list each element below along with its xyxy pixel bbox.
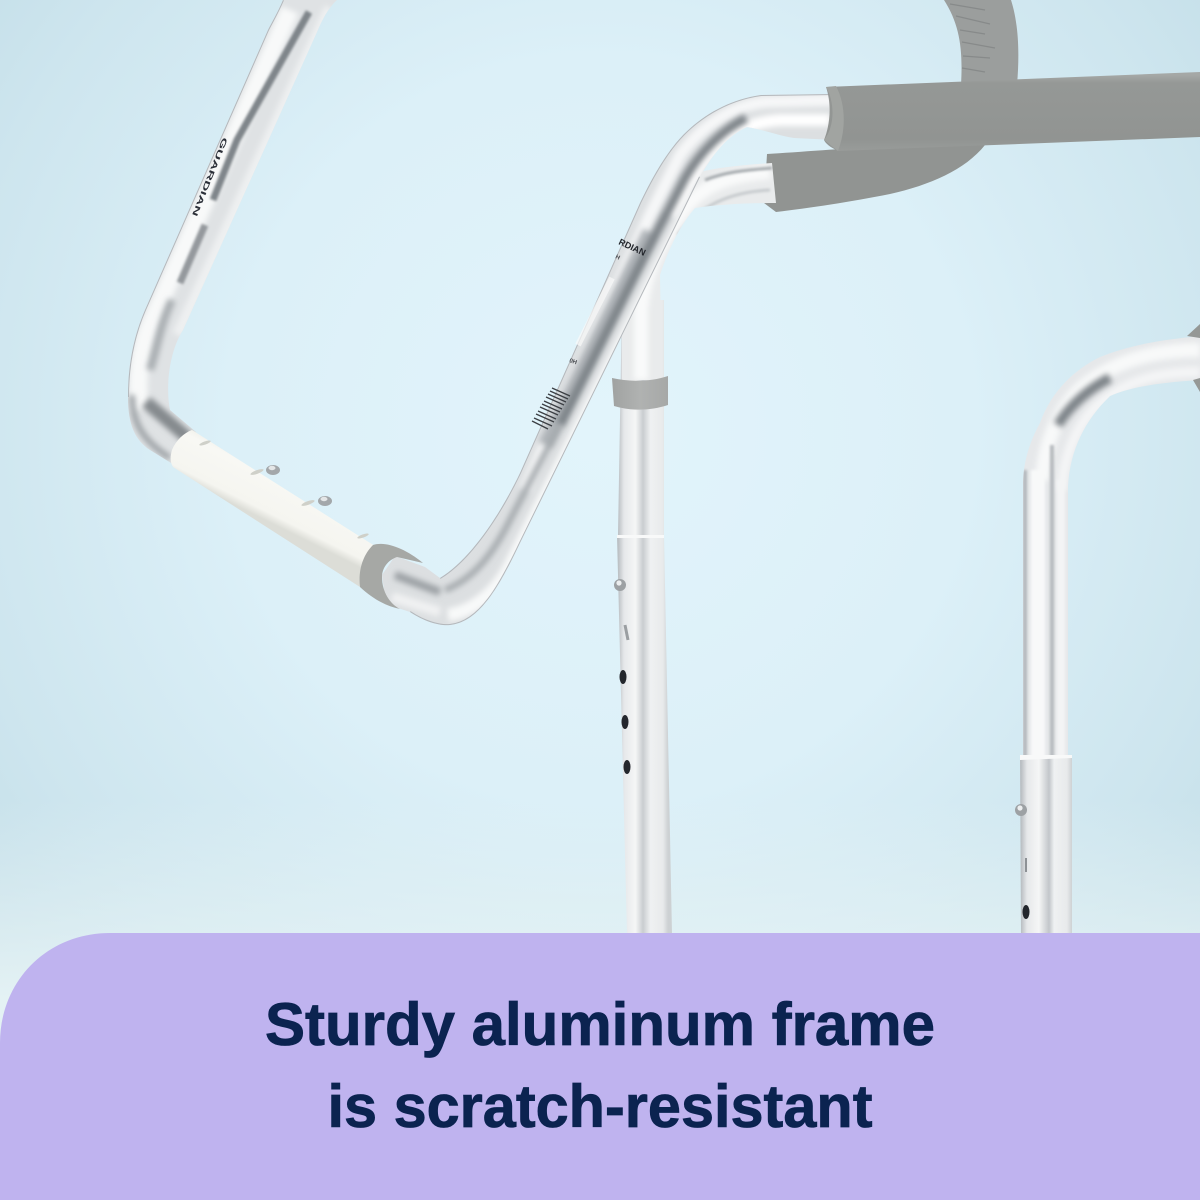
icon: right adjustable leg sleeve	[1015, 755, 1072, 934]
icon: push button	[1015, 804, 1027, 816]
icon: secondary frame tube	[622, 163, 776, 380]
icon: right tube grip stub	[1187, 324, 1200, 392]
icon: adjustment holes	[620, 670, 626, 684]
heading: caption first line: Sturdy aluminum frame	[265, 991, 935, 1058]
brand text: RDIAN	[617, 237, 647, 258]
icon: main grip	[824, 72, 1200, 151]
icon: left adjustable leg sleeve	[614, 535, 672, 934]
icon: right frame tube	[1015, 324, 1200, 770]
secondary code: 0H	[568, 358, 578, 366]
icon: push button	[614, 579, 626, 591]
icon: padded back rail arc	[944, 0, 1018, 85]
icon: leg height ring	[612, 376, 668, 410]
icon: adjustment hole	[1022, 905, 1030, 919]
brand text on loop: GUARDIAN	[190, 136, 230, 218]
heading: caption second line: is scratch-resistant	[328, 1073, 873, 1140]
icon: rivet slots and buttons	[199, 439, 369, 540]
icon: rear lower grip	[764, 145, 985, 212]
icon: end cap ring	[360, 544, 423, 609]
icon: main frame tube	[370, 85, 840, 635]
panel: caption	[0, 933, 1200, 1200]
icon: barcode	[532, 388, 570, 429]
model text: H	[614, 254, 621, 262]
icon: left leg upper tube	[618, 300, 664, 536]
icon: left hand loop tube	[128, 0, 336, 463]
label: product markings on main tube	[532, 237, 647, 429]
icon: white handle sleeve	[171, 430, 423, 609]
